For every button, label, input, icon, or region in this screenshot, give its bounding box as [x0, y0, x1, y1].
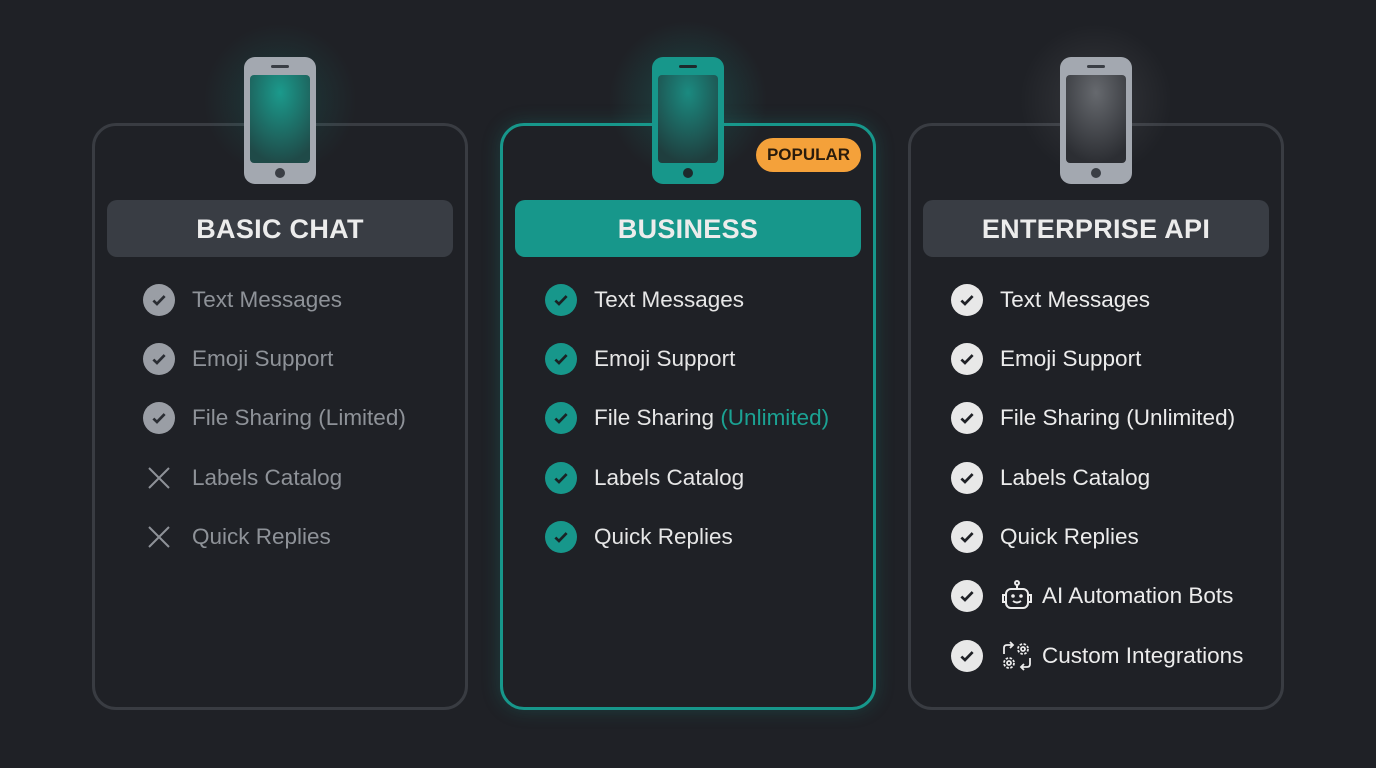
list: business features: Emoji Support: [594, 346, 735, 371]
list: basic features: File Sharing (Limited): [192, 405, 406, 430]
list: basic features: Text Messages: [192, 287, 342, 312]
list: enterprise features: Emoji Support: [1000, 346, 1141, 371]
list: business features: (Unlimited): [720, 405, 829, 430]
list: business features: File Sharing: [594, 405, 714, 430]
list: business features: Text Messages: [594, 287, 744, 312]
list: basic features: Labels Catalog: [192, 465, 342, 490]
list: business features: Labels Catalog: [594, 465, 744, 490]
list: basic features: Quick Replies: [192, 524, 331, 549]
heading: enterprise api: ENTERPRISE API: [982, 214, 1210, 244]
heading: basic chat: [107, 200, 453, 257]
icon: phone basic: [244, 57, 316, 184]
glow: enterprise: [1006, 10, 1186, 190]
list: enterprise features: [951, 284, 1243, 672]
icon: phone business: [652, 57, 724, 184]
list: business features: [545, 284, 829, 553]
glow: basic: [190, 10, 370, 190]
panel: basic chat: [92, 123, 468, 710]
list: basic features: Emoji Support: [192, 346, 333, 371]
list: enterprise features: Custom Integrations: [1042, 643, 1243, 668]
list: business features: Quick Replies: [594, 524, 733, 549]
badge: popular: POPULAR: [767, 145, 850, 164]
list: enterprise features: Quick Replies: [1000, 524, 1139, 549]
list: enterprise features: Text Messages: [1000, 287, 1150, 312]
icon: phone enterprise: [1060, 57, 1132, 184]
heading: basic chat: BASIC CHAT: [196, 214, 364, 244]
list: basic features: [143, 284, 406, 549]
list: enterprise features: File Sharing (Unlimited): [1000, 405, 1235, 430]
panel: enterprise api: [908, 123, 1284, 710]
heading: enterprise api: [923, 200, 1269, 257]
list: enterprise features: AI Automation Bots: [1042, 583, 1233, 608]
heading: business: BUSINESS: [618, 214, 758, 244]
panel: business: [500, 123, 876, 710]
glow: business: [598, 10, 778, 190]
icon: robot: [1002, 580, 1032, 609]
badge: popular: [756, 138, 861, 172]
list: enterprise features: Labels Catalog: [1000, 465, 1150, 490]
heading: business: [515, 200, 861, 257]
icon: gears: [1003, 641, 1031, 671]
